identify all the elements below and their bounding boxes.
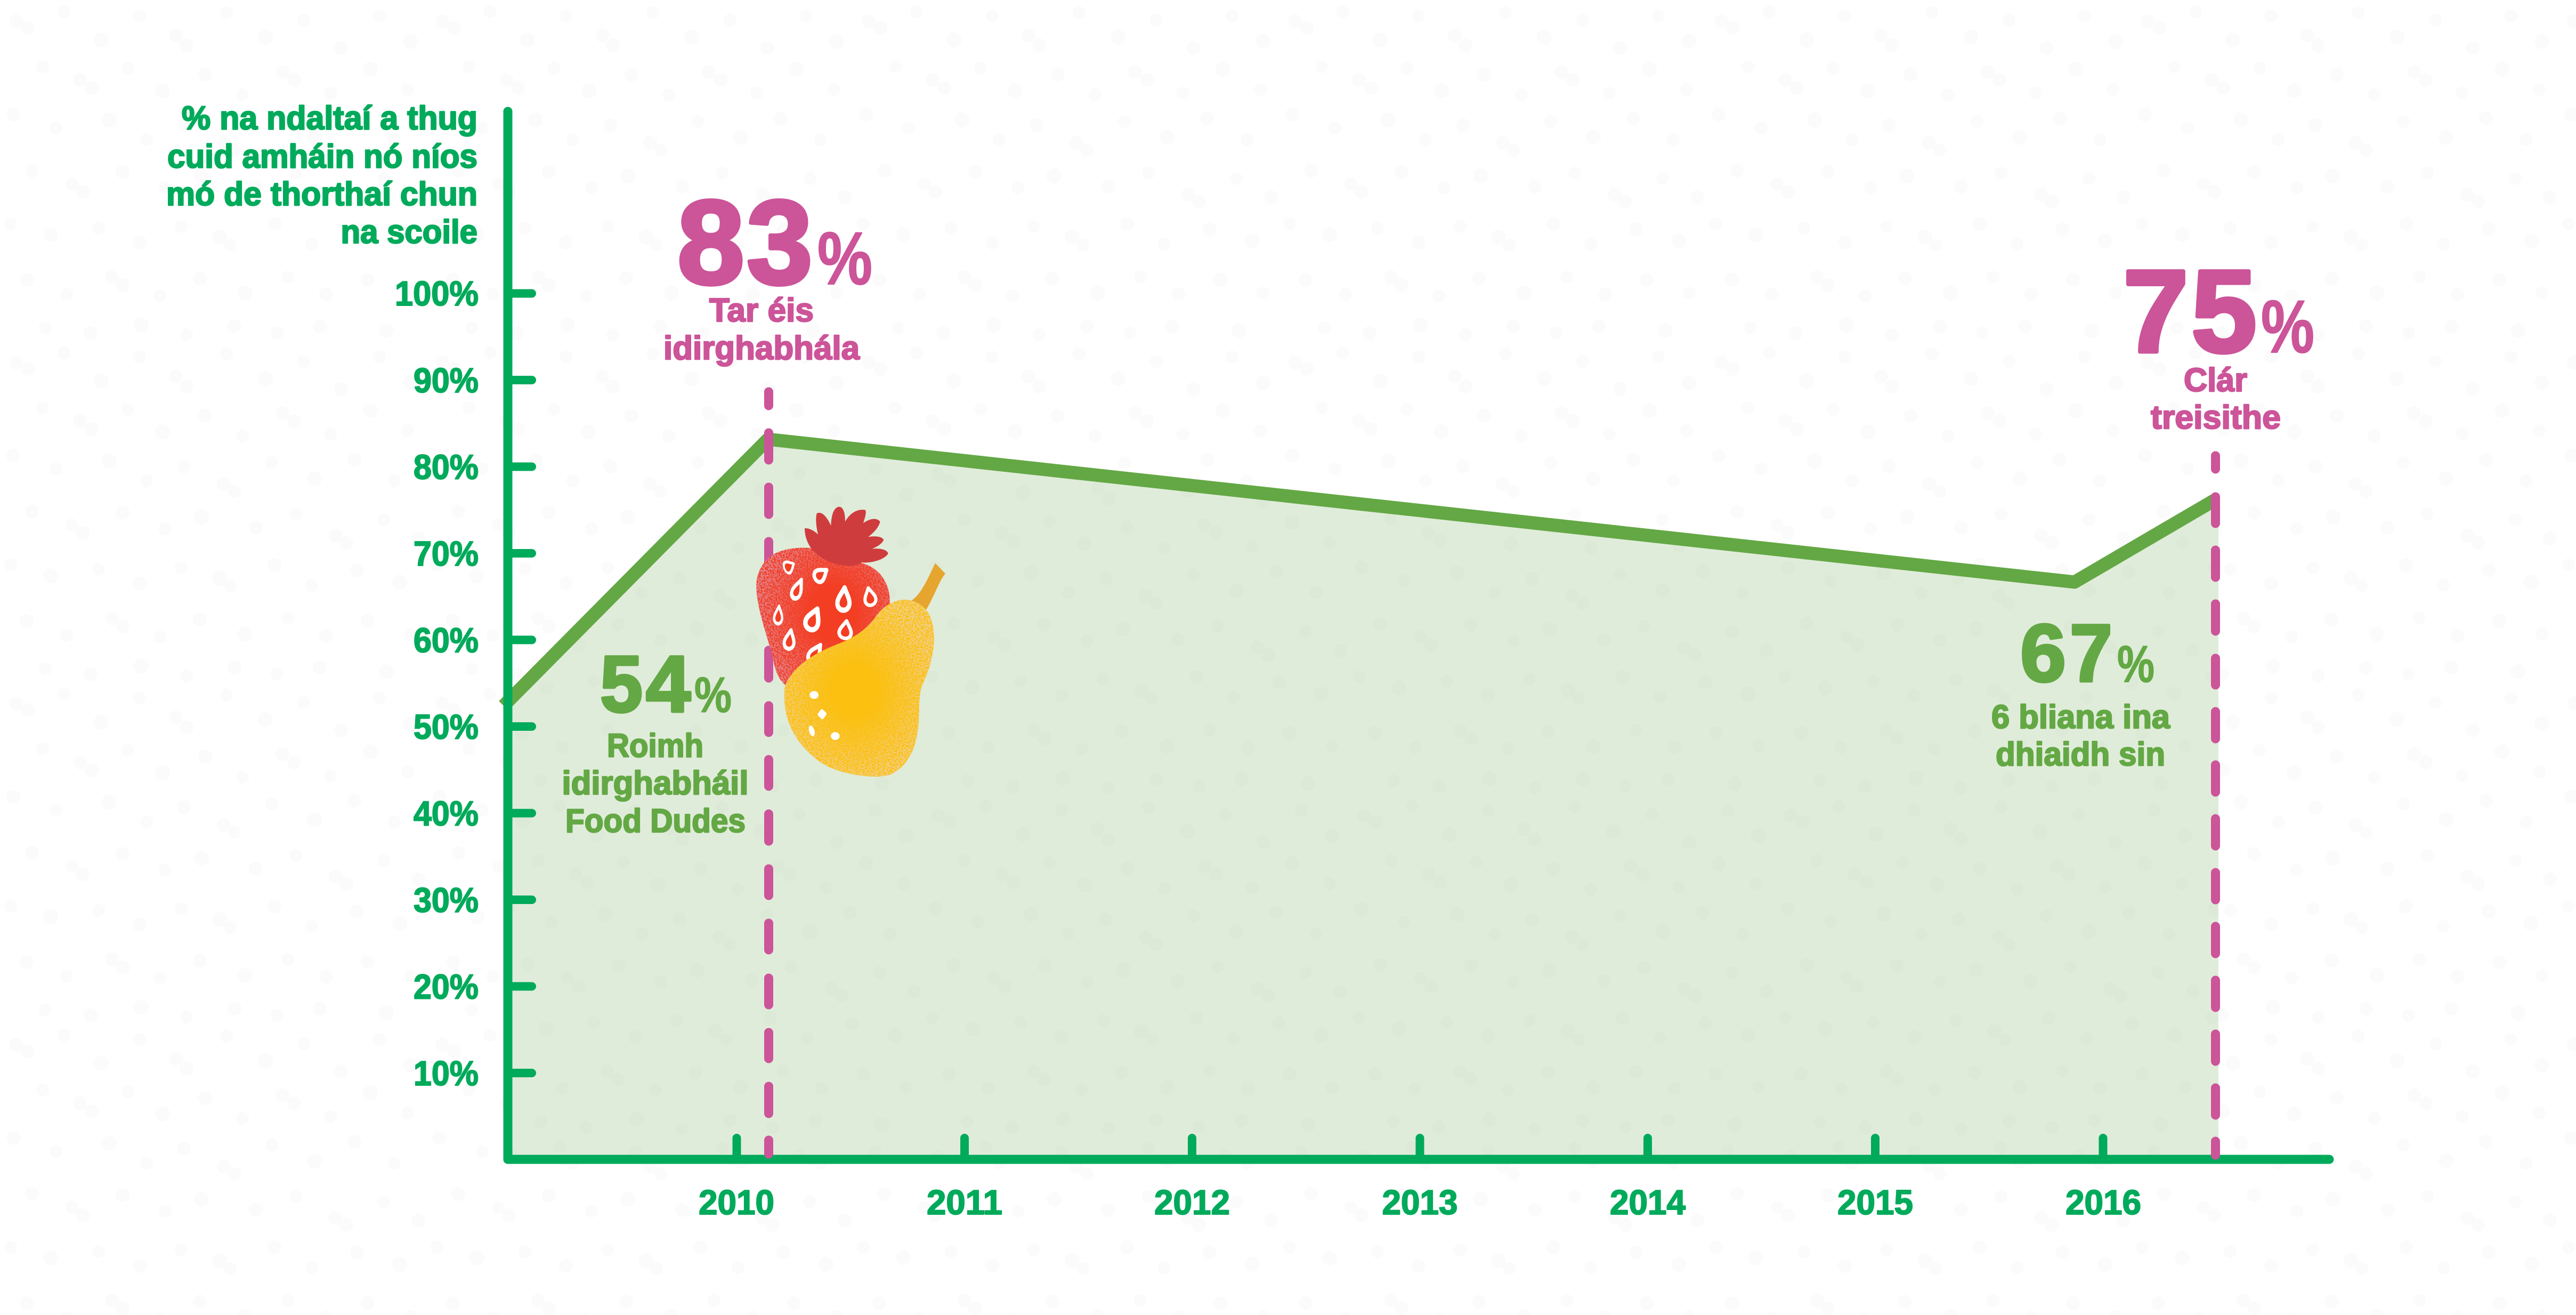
area under the line [512,439,2218,1155]
y axis title: na scoile [341,214,477,251]
callout: 54% before intervention: Roimh [607,728,703,764]
y axis ticks [512,293,532,1073]
pink dashed marker: intervention [764,392,773,1154]
callout: 83% after intervention: 8 [677,176,744,309]
pear [784,563,945,777]
y axis [508,111,532,1159]
callout: 67% six years later: 7 [2070,608,2112,699]
callout: 67% six years later: 6 [2020,608,2066,699]
y axis title: % na ndaltaí a thug [182,100,477,136]
y axis labels: 90% [414,361,479,400]
x axis year labels: 2016 [2065,1183,2141,1222]
callout: 75% reinforced programme: % [2261,285,2314,368]
callout: 83% after intervention: 3 [747,176,813,309]
x axis year labels: 2010 [699,1183,774,1222]
callout: 75% reinforced programme: 5 [2191,246,2257,377]
x axis year labels: 2013 [1382,1183,1458,1222]
callout: 54% before intervention: 5 [600,639,643,729]
y axis labels: 10% [414,1054,479,1093]
x axis year labels: 2014 [1610,1183,1686,1222]
pear speckles [808,691,840,740]
callout: 83% after intervention [663,176,872,367]
y axis labels: 50% [414,707,479,746]
callout: 75% reinforced programme: 7 [2123,246,2189,377]
x axis [508,1138,2329,1159]
callout: 83% after intervention: Tar éis [709,292,814,329]
callout: 67% six years later: % [2117,635,2154,693]
callout: 54% before intervention: Food Dudes [565,803,746,840]
callout: 83% after intervention: % [817,216,872,300]
pink dashed marker: reinforced programme [2211,456,2220,1155]
y axis title [166,100,477,251]
x axis year labels [699,1183,2141,1222]
y axis labels: 30% [414,881,479,919]
callout: 67% six years later [1991,608,2170,773]
strawberry seeds [774,559,877,665]
callout: 54% before intervention: idirghabháil [562,765,748,802]
x axis year labels: 2015 [1837,1183,1913,1222]
callout: 75% reinforced programme [2123,246,2314,436]
y axis labels: 60% [414,620,479,660]
callout: 54% before intervention [562,639,748,840]
strawberry [756,507,890,687]
y axis labels [395,274,479,1093]
callout: 67% six years later: 6 bliana ina [1991,699,2170,736]
callout: 75% reinforced programme: Clár [2184,362,2247,399]
callout: 75% reinforced programme: treisithe [2151,399,2281,436]
y axis title: mó de thorthaí chun [166,176,477,213]
y axis labels: 100% [395,274,479,313]
y axis labels: 80% [414,448,479,486]
callout: 54% before intervention: 4 [646,639,691,729]
icon: strawberry and pear [756,507,945,777]
callout: 83% after intervention: idirghabhála [663,330,860,367]
callout: 54% before intervention: % [694,667,732,723]
trend line [504,439,2216,706]
x axis year labels: 2012 [1154,1183,1230,1222]
y axis title: cuid amháin nó níos [167,139,477,175]
callout: 67% six years later: dhiaidh sin [1996,736,2165,773]
y axis labels: 20% [414,967,479,1006]
y axis labels: 70% [414,534,479,573]
y axis labels: 40% [414,794,479,833]
x axis ticks [736,1138,2103,1157]
x axis year labels: 2011 [927,1183,1002,1222]
